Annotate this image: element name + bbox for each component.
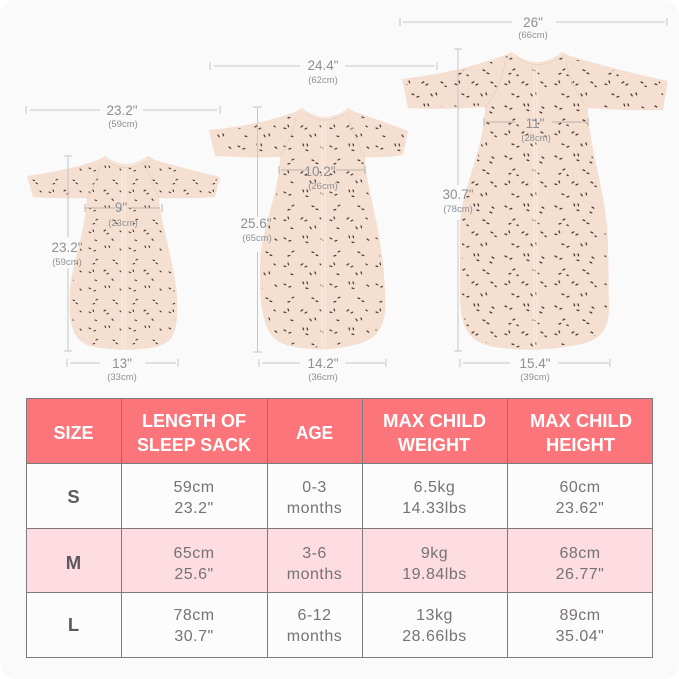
M hem width bbox=[259, 356, 386, 383]
M length bbox=[240, 107, 272, 352]
S length bbox=[51, 156, 83, 351]
L length bbox=[442, 49, 474, 351]
M length: (65cm) bbox=[242, 233, 272, 244]
table header row: WEIGHT bbox=[398, 434, 471, 455]
M hem width: 14.2" bbox=[307, 356, 339, 371]
row M: 3-6 bbox=[302, 545, 327, 562]
L sleeve span: 26" bbox=[523, 15, 543, 30]
S sleeve span bbox=[26, 103, 220, 130]
row L: 35.04" bbox=[556, 628, 604, 645]
table header row: MAX CHILD bbox=[530, 410, 632, 431]
row L: months bbox=[287, 628, 342, 645]
row M: 68cm bbox=[559, 545, 601, 562]
row S: 23.62" bbox=[556, 500, 604, 517]
row M: 19.84lbs bbox=[402, 566, 467, 583]
L sleeve span bbox=[400, 15, 667, 41]
sleep sack size S bbox=[27, 156, 220, 350]
table header row: SLEEP SACK bbox=[137, 434, 252, 455]
row L: 6-12 bbox=[297, 607, 332, 624]
M hem width: (36cm) bbox=[308, 372, 338, 383]
L hem width: (39cm) bbox=[520, 372, 550, 383]
S length: 23.2" bbox=[51, 240, 83, 255]
M sleeve span bbox=[210, 58, 437, 86]
L length: (78cm) bbox=[443, 204, 473, 215]
M length: 25.6" bbox=[240, 216, 272, 231]
M sleeve span: (62cm) bbox=[308, 75, 338, 86]
L hem width bbox=[460, 356, 610, 383]
S length: (59cm) bbox=[52, 257, 82, 268]
L hem width: 15.4" bbox=[519, 356, 551, 371]
row S: 60cm bbox=[559, 479, 601, 496]
S chest width: 9" bbox=[115, 200, 127, 215]
row S: 0-3 bbox=[302, 479, 327, 496]
row S: 59cm bbox=[173, 479, 215, 496]
S chest width bbox=[85, 200, 162, 229]
S hem width: (33cm) bbox=[107, 372, 137, 383]
S chest width: (23cm) bbox=[108, 218, 138, 229]
row S: S bbox=[67, 486, 80, 507]
row M: 25.6" bbox=[174, 566, 214, 583]
row L: L bbox=[68, 614, 79, 635]
dimensions size L bbox=[400, 15, 667, 383]
dimensions size S bbox=[26, 103, 220, 383]
sleep sack size L bbox=[402, 52, 668, 351]
L sleeve span: (66cm) bbox=[518, 30, 548, 41]
row S bbox=[26, 463, 653, 528]
row L: 13kg bbox=[416, 607, 453, 624]
S sleeve span: 23.2" bbox=[106, 103, 138, 118]
M chest width bbox=[279, 164, 365, 192]
table header row: AGE bbox=[296, 422, 333, 443]
row L bbox=[26, 592, 653, 657]
row M: months bbox=[287, 566, 342, 583]
row M: M bbox=[66, 552, 81, 573]
table header row: SIZE bbox=[54, 422, 94, 443]
M chest width: (26cm) bbox=[308, 181, 338, 192]
row M: 26.77" bbox=[556, 566, 604, 583]
row S: months bbox=[287, 500, 342, 517]
L length: 30.7" bbox=[442, 187, 474, 202]
row L: 78cm bbox=[173, 607, 215, 624]
size table bbox=[26, 398, 653, 658]
M chest width: 10.2" bbox=[304, 164, 336, 179]
row S: 14.33lbs bbox=[402, 500, 467, 517]
row L: 28.66lbs bbox=[402, 628, 467, 645]
M sleeve span: 24.4" bbox=[307, 58, 339, 73]
table header row bbox=[26, 398, 653, 463]
S sleeve span: (59cm) bbox=[108, 119, 138, 130]
row M: 9kg bbox=[421, 545, 448, 562]
row S: 6.5kg bbox=[414, 479, 455, 496]
row M bbox=[26, 528, 653, 592]
S hem width bbox=[67, 356, 178, 383]
L chest width: 11" bbox=[526, 116, 545, 131]
sleep sack size M bbox=[209, 108, 408, 350]
S hem width: 13" bbox=[112, 356, 132, 371]
L chest width bbox=[484, 116, 588, 144]
row M: 65cm bbox=[173, 545, 215, 562]
L chest width: (28cm) bbox=[521, 133, 551, 144]
row S: 23.2" bbox=[174, 500, 214, 517]
table header row: HEIGHT bbox=[546, 434, 616, 455]
dimensions size M bbox=[210, 58, 437, 383]
table header row: LENGTH OF bbox=[142, 410, 246, 431]
table header row: MAX CHILD bbox=[383, 410, 486, 431]
row L: 30.7" bbox=[174, 628, 214, 645]
row L: 89cm bbox=[559, 607, 601, 624]
